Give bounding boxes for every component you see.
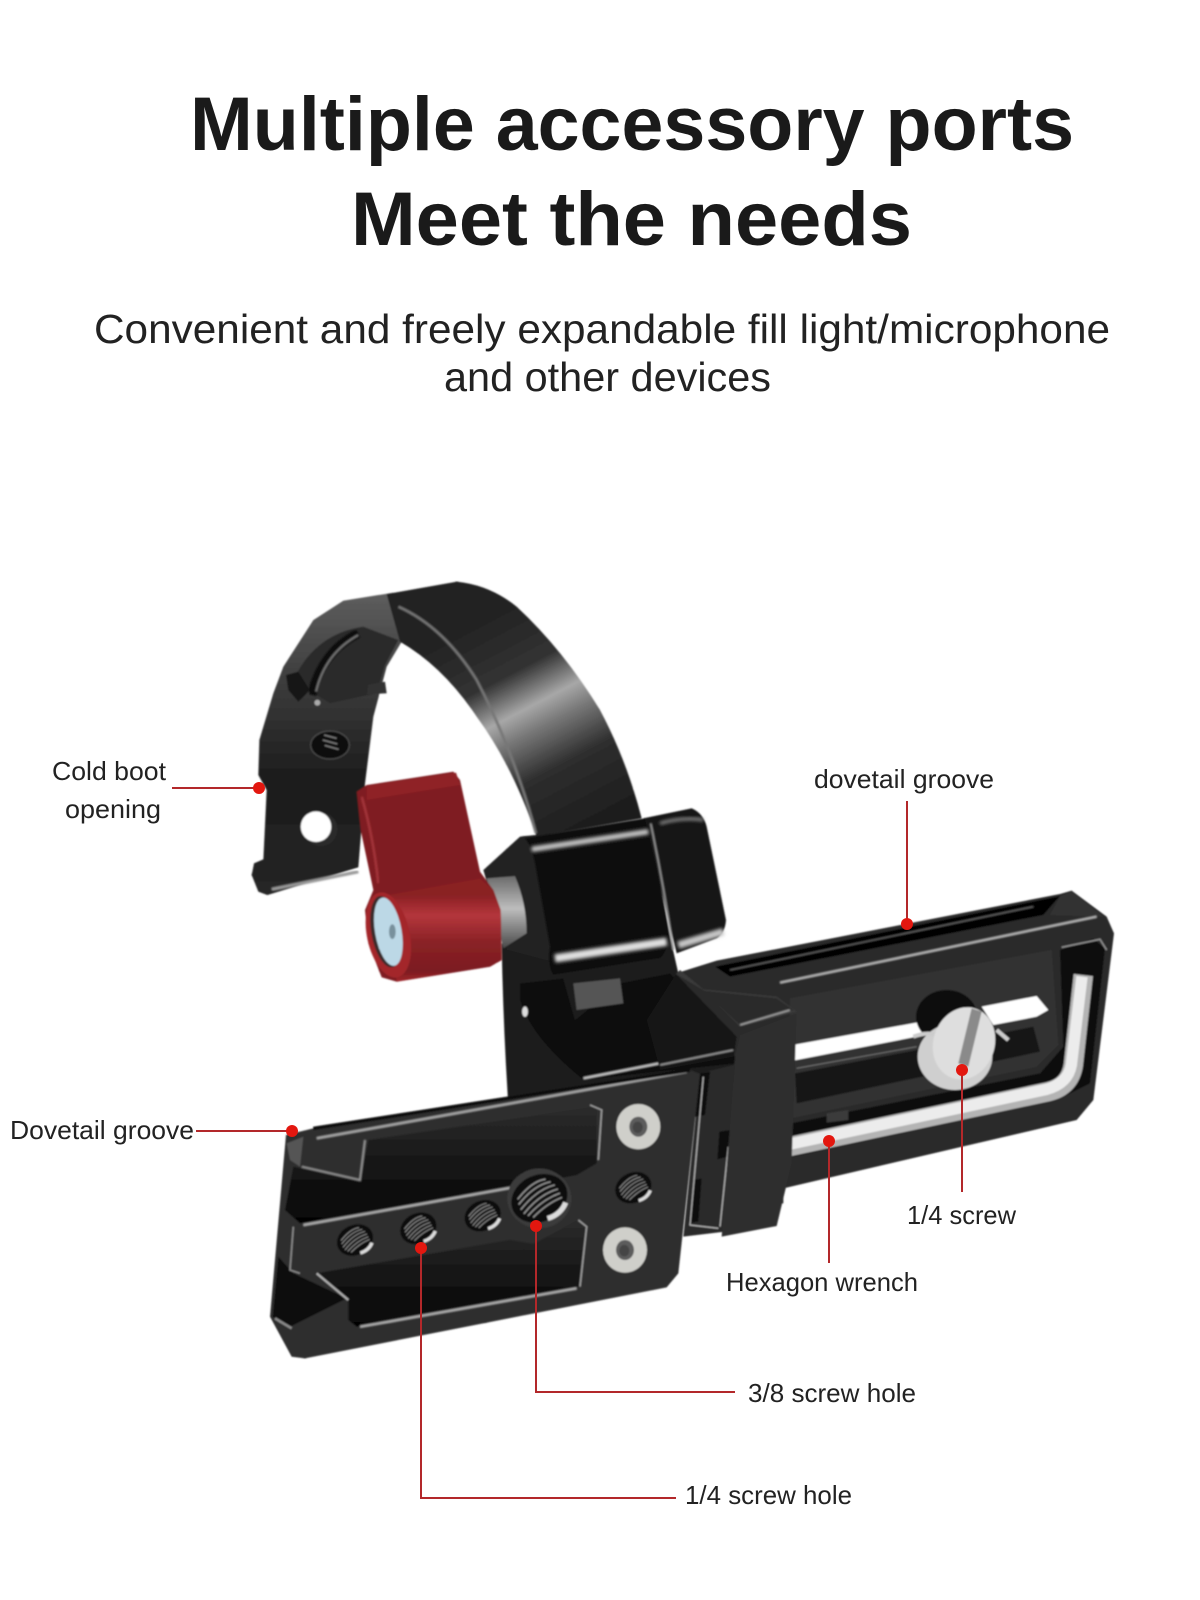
left ring plate [252, 593, 402, 895]
callout: 3/8 screw hole: 3/8 screw hole [748, 1378, 916, 1408]
1/4 screw holes [332, 1166, 657, 1261]
callout: 3/8 screw hole [530, 1220, 916, 1408]
clamp cylinder [525, 808, 726, 975]
clamp ring and knob [252, 582, 763, 1130]
plate body [270, 1070, 700, 1358]
callout: Cold boot opening: opening [65, 794, 161, 824]
neck below clamp [502, 937, 763, 1130]
callout: Cold boot opening [52, 756, 265, 824]
product illustration: accessory clamp [252, 582, 1114, 1358]
subtitle: and other devices [444, 354, 771, 400]
callout: dovetail groove top [814, 764, 994, 930]
callout: Dovetail groove left [10, 1115, 298, 1145]
callout: Hexagon wrench: Hexagon wrench [726, 1267, 918, 1297]
callout: 1/4 screw [907, 1064, 1016, 1230]
center clip block [647, 970, 797, 1237]
subtitle [94, 306, 1110, 400]
title: Multiple accessory ports [190, 82, 1074, 167]
callout: Dovetail groove left: Dovetail groove [10, 1115, 194, 1145]
title [190, 82, 1074, 262]
plate frame [676, 891, 1114, 1203]
subtitle: Convenient and freely expandable fill light/microphone [94, 306, 1110, 352]
callout: Hexagon wrench [726, 1135, 918, 1297]
callout: Cold boot opening: Cold boot [52, 756, 167, 786]
callout: 1/4 screw hole: 1/4 screw hole [685, 1480, 852, 1510]
right dovetail plate [676, 891, 1114, 1203]
hexagon wrench [786, 975, 1083, 1147]
red knob [357, 772, 502, 982]
thumb screw [913, 990, 1008, 1090]
wide strap [387, 582, 642, 837]
knob end cap [365, 894, 407, 970]
collar [483, 833, 557, 963]
silver cap screws [603, 1104, 660, 1273]
title: Meet the needs [351, 177, 912, 262]
callout: dovetail groove top: dovetail groove [814, 764, 994, 794]
left plate with screw holes [270, 1070, 700, 1358]
plate details [273, 1070, 690, 1328]
through hole [301, 811, 337, 846]
slot openings [793, 996, 1048, 1061]
3/8 screw hole [503, 1165, 575, 1232]
plate inner panel [790, 938, 1107, 1157]
callout: 1/4 screw hole [415, 1242, 852, 1510]
callout: 1/4 screw: 1/4 screw [907, 1200, 1016, 1230]
upper thread hole [311, 731, 349, 759]
